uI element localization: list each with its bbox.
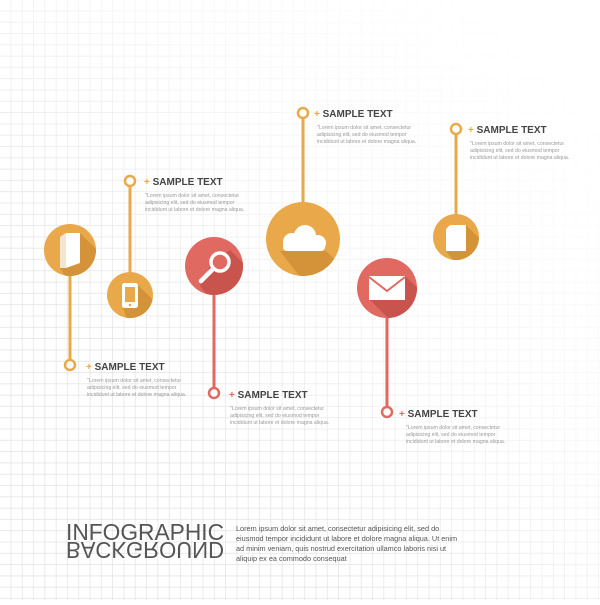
item 1: book: "Lorem ipsum dolor sit amet, consectetur xyxy=(87,378,181,384)
item 2: phone xyxy=(107,176,244,330)
item 5: mail: adipisicing elit, sed do eiusmod tempor xyxy=(406,432,496,438)
item 2: phone: "Lorem ipsum dolor sit amet, consectetur xyxy=(145,193,239,199)
item 4: cloud: "Lorem ipsum dolor sit amet, consectetur xyxy=(317,125,411,131)
item 6: document: + SAMPLE TEXT xyxy=(468,125,547,136)
item 5: mail: incididunt ut labore et dolore magna aliqua. xyxy=(406,439,505,445)
item 2: phone: adipisicing elit, sed do eiusmod tempor xyxy=(145,200,235,206)
item 2: phone: incididunt ut labore et dolore magna aliqua. xyxy=(145,207,244,213)
title: BACKGROUND xyxy=(66,537,224,563)
item 5: mail: + SAMPLE TEXT xyxy=(399,409,478,420)
description text: Lorem ipsum dolor sit amet, consectetur adipisicing elit, sed do xyxy=(236,524,439,533)
item 6: document: adipisicing elit, sed do eiusmod tempor xyxy=(470,148,560,154)
item 3: search: "Lorem ipsum dolor sit amet, consectetur xyxy=(230,406,324,412)
item 6: document: "Lorem ipsum dolor sit amet, consectetur xyxy=(470,141,564,147)
item 3: search: adipisicing elit, sed do eiusmod tempor xyxy=(230,413,320,419)
item 3: search: incididunt ut labore et dolore magna aliqua. xyxy=(230,420,329,426)
item 5: mail: "Lorem ipsum dolor sit amet, consectetur xyxy=(406,425,500,431)
item 4: cloud: incididunt ut labore et dolore magna aliqua. xyxy=(317,139,416,145)
item 6: document: incididunt ut labore et dolore magna aliqua. xyxy=(470,155,569,161)
item 4: cloud: adipisicing elit, sed do eiusmod tempor xyxy=(317,132,407,138)
item 3: search xyxy=(185,237,329,426)
description text: aliquip ex ea commodo consequat xyxy=(236,554,347,563)
item 5: mail xyxy=(357,258,505,445)
title xyxy=(66,519,224,563)
title: INFOGRAPHIC xyxy=(66,519,224,545)
item 6: document xyxy=(433,124,569,270)
item 3: search: + SAMPLE TEXT xyxy=(229,390,308,401)
item 2: phone: + SAMPLE TEXT xyxy=(144,177,223,188)
description text: ad minim veniam, quis nostrud exercitation ullamco laboris nisi ut xyxy=(236,544,446,553)
item 4: cloud: + SAMPLE TEXT xyxy=(314,109,393,120)
item 1: book: adipisicing elit, sed do eiusmod tempor xyxy=(87,385,177,391)
item 1: book xyxy=(44,224,186,398)
description text: eiusmod tempor incididunt ut labore et dolore magna aliqua. Ut enim xyxy=(236,534,457,543)
item 1: book: + SAMPLE TEXT xyxy=(86,362,165,373)
item 4: cloud xyxy=(266,108,416,290)
item 1: book: incididunt ut labore et dolore magna aliqua. xyxy=(87,392,186,398)
